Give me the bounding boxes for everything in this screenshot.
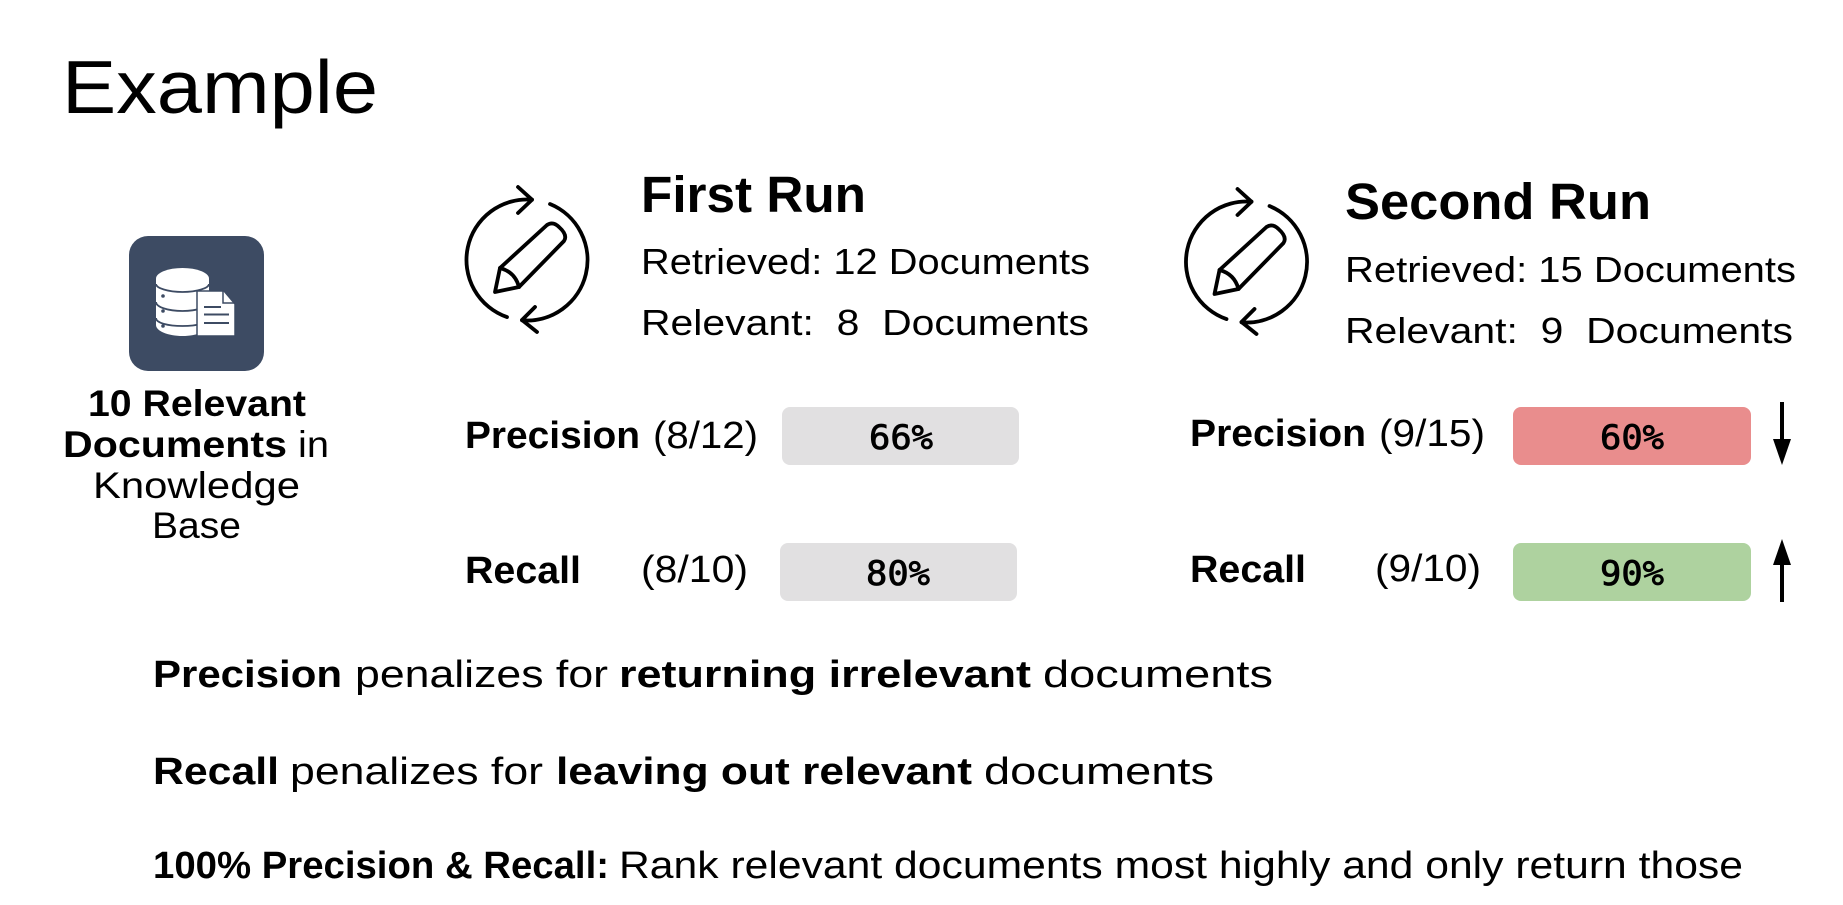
precision label: Precision — [1190, 413, 1366, 455]
takeaway: recall: penalizes for — [290, 751, 543, 793]
takeaway: recall: Recall — [153, 751, 279, 793]
takeaway: precision — [153, 654, 1273, 696]
relevant count: Relevant: 9 Documents — [1345, 310, 1793, 351]
knowledge base caption — [63, 383, 329, 546]
recall bar — [1513, 543, 1751, 601]
relevant count: Relevant: 8 Documents — [641, 302, 1089, 343]
recall bar: 90% — [1600, 554, 1664, 594]
takeaway: precision: documents — [1043, 654, 1273, 696]
takeaway: precision: penalizes for — [355, 654, 608, 696]
recall label: (8/10) — [641, 549, 748, 591]
recall bar: 80% — [866, 554, 930, 594]
recall label — [465, 549, 748, 592]
knowledge base caption: Documents — [63, 424, 287, 465]
precision bar — [782, 407, 1019, 465]
takeaway: perfect score: 100% Precision & Recall: — [153, 845, 609, 887]
icon: refresh pencil — [466, 187, 588, 332]
takeaway: precision: returning irrelevant — [619, 654, 1031, 696]
precision bar: 60% — [1600, 418, 1664, 458]
arrow: precision down — [1773, 402, 1791, 465]
panel: second run — [1186, 173, 1796, 602]
recall label: (9/10) — [1375, 548, 1481, 590]
takeaway: recall: documents — [984, 751, 1214, 793]
first run heading: First Run — [641, 166, 866, 223]
icon: refresh pencil — [1186, 189, 1307, 334]
precision label: Precision — [465, 415, 640, 457]
knowledge base caption: Knowledge — [93, 465, 300, 506]
icon: database and document — [129, 236, 264, 371]
precision bar — [1513, 407, 1751, 465]
precision label: (8/12) — [653, 415, 758, 457]
second run heading: Second Run — [1345, 173, 1651, 230]
recall label — [1190, 548, 1481, 591]
precision label — [465, 415, 758, 457]
title: Example — [62, 45, 378, 129]
takeaway: precision: Precision — [153, 654, 342, 696]
retrieved count: Retrieved: 12 Documents — [641, 241, 1090, 282]
precision label — [1190, 413, 1485, 455]
takeaway: perfect score — [153, 845, 1743, 887]
knowledge base caption: 10 Relevant — [88, 383, 306, 424]
takeaway: perfect score: Rank relevant documents most highly and only return those — [619, 845, 1743, 887]
recall label: Recall — [1190, 549, 1306, 591]
recall label: Recall — [465, 550, 581, 592]
precision label: (9/15) — [1379, 413, 1485, 455]
takeaway: recall — [153, 751, 1214, 793]
retrieved count: Retrieved: 15 Documents — [1345, 249, 1796, 290]
panel: first run — [465, 166, 1090, 601]
takeaway: recall: leaving out relevant — [556, 751, 972, 793]
recall bar — [780, 543, 1017, 601]
arrow: recall up — [1773, 539, 1791, 602]
knowledge base caption: in — [298, 424, 329, 465]
panel: knowledge base — [63, 236, 329, 546]
precision bar: 66% — [869, 418, 933, 458]
knowledge base caption: Base — [152, 505, 241, 546]
